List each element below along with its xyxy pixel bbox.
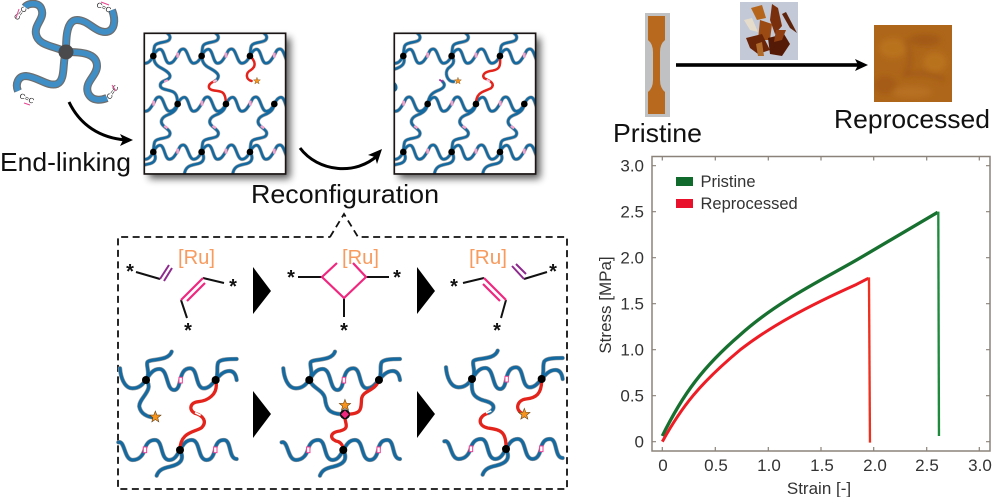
y-axis tick labels: 0.5 bbox=[620, 386, 644, 406]
x-axis tick labels: 2.5 bbox=[915, 456, 939, 475]
label: Reconfiguration: Reconfiguration bbox=[251, 179, 439, 209]
y-axis tick labels: 1.5 bbox=[620, 294, 644, 314]
panel: network after reconfiguration bbox=[393, 32, 546, 184]
y-axis tick labels bbox=[620, 156, 644, 452]
legend: Reprocessed bbox=[700, 195, 798, 213]
curve: pristine bbox=[662, 212, 939, 436]
legend bbox=[676, 173, 798, 213]
dashed callout frame bbox=[118, 214, 567, 489]
molecular scheme: intermediate with [Ru] junction bbox=[282, 352, 400, 476]
legend: Pristine bbox=[700, 173, 756, 191]
chemistry: olefin products with [Ru]: [Ru] bbox=[469, 247, 507, 269]
stress-strain chart bbox=[596, 156, 992, 497]
x-axis tick labels: 2.0 bbox=[863, 456, 887, 475]
label: Pristine: Pristine bbox=[613, 118, 702, 148]
axis title: Stress: Stress [MPa] bbox=[596, 256, 615, 354]
chemistry: metallacyclobutane intermediate: * bbox=[340, 320, 348, 342]
y-axis tick labels: 0 bbox=[635, 432, 644, 452]
chemistry: olefin reactants with [Ru]: * bbox=[229, 276, 237, 298]
arrowhead: step 2 chemistry bbox=[417, 267, 435, 314]
x-axis tick labels: 1.5 bbox=[810, 456, 834, 475]
label: End-linking: End-linking bbox=[0, 147, 131, 177]
chemistry: olefin reactants with [Ru]: [Ru] bbox=[178, 247, 215, 269]
chemistry: olefin reactants with [Ru]: * bbox=[184, 320, 192, 342]
photo: reprocessed sheet bbox=[873, 25, 952, 102]
plot frame and ticks bbox=[652, 156, 990, 451]
chemistry: metallacyclobutane intermediate: * bbox=[393, 267, 401, 289]
star polymer precursor: C=C bbox=[12, 4, 29, 22]
photo: flakes of cut material bbox=[740, 2, 798, 60]
chemistry: olefin reactants with [Ru] bbox=[126, 247, 237, 342]
star polymer precursor bbox=[12, 0, 121, 106]
curve: reprocessed bbox=[662, 277, 870, 443]
chemistry: olefin products with [Ru]: * bbox=[493, 320, 501, 342]
arrowhead: step 2 molecular bbox=[417, 391, 435, 438]
chemistry: olefin reactants with [Ru]: * bbox=[126, 261, 134, 283]
y-axis tick labels: 2.0 bbox=[620, 248, 644, 268]
star polymer precursor: C=C bbox=[18, 91, 36, 106]
photo: pristine dogbone specimen bbox=[645, 13, 670, 117]
chemistry: olefin products with [Ru] bbox=[450, 247, 557, 342]
arrow: pristine to reprocessed bbox=[676, 59, 868, 71]
y-axis tick labels: 2.5 bbox=[620, 202, 644, 222]
y-axis tick labels: 1.0 bbox=[620, 340, 644, 360]
arrowhead: step 1 molecular bbox=[253, 391, 271, 438]
star polymer precursor: C=C bbox=[104, 83, 121, 101]
molecular scheme: exchanged strands bbox=[444, 351, 563, 475]
x-axis tick labels: 0 bbox=[658, 456, 668, 475]
x-axis tick labels bbox=[658, 456, 992, 475]
star polymer precursor: C=C bbox=[95, 0, 113, 15]
chemistry: metallacyclobutane intermediate bbox=[287, 247, 401, 342]
panel: network before reconfiguration bbox=[143, 32, 296, 184]
molecular scheme: initial strands bbox=[118, 352, 237, 476]
arrow: reconfiguration bbox=[300, 148, 382, 169]
arrowhead: step 1 chemistry bbox=[253, 267, 271, 314]
label: Reprocessed: Reprocessed bbox=[834, 104, 990, 134]
arrow: end-linking bbox=[69, 102, 133, 146]
x-axis tick labels: 3.0 bbox=[968, 456, 992, 475]
chemistry: metallacyclobutane intermediate: [Ru] bbox=[342, 247, 379, 269]
chemistry: olefin products with [Ru]: * bbox=[549, 261, 557, 283]
chemistry: metallacyclobutane intermediate: * bbox=[287, 267, 295, 289]
x-axis tick labels: 0.5 bbox=[704, 456, 728, 475]
y-axis tick labels: 3.0 bbox=[620, 156, 644, 176]
chemistry: olefin products with [Ru]: * bbox=[450, 276, 458, 298]
x-axis tick labels: 1.0 bbox=[757, 456, 781, 475]
